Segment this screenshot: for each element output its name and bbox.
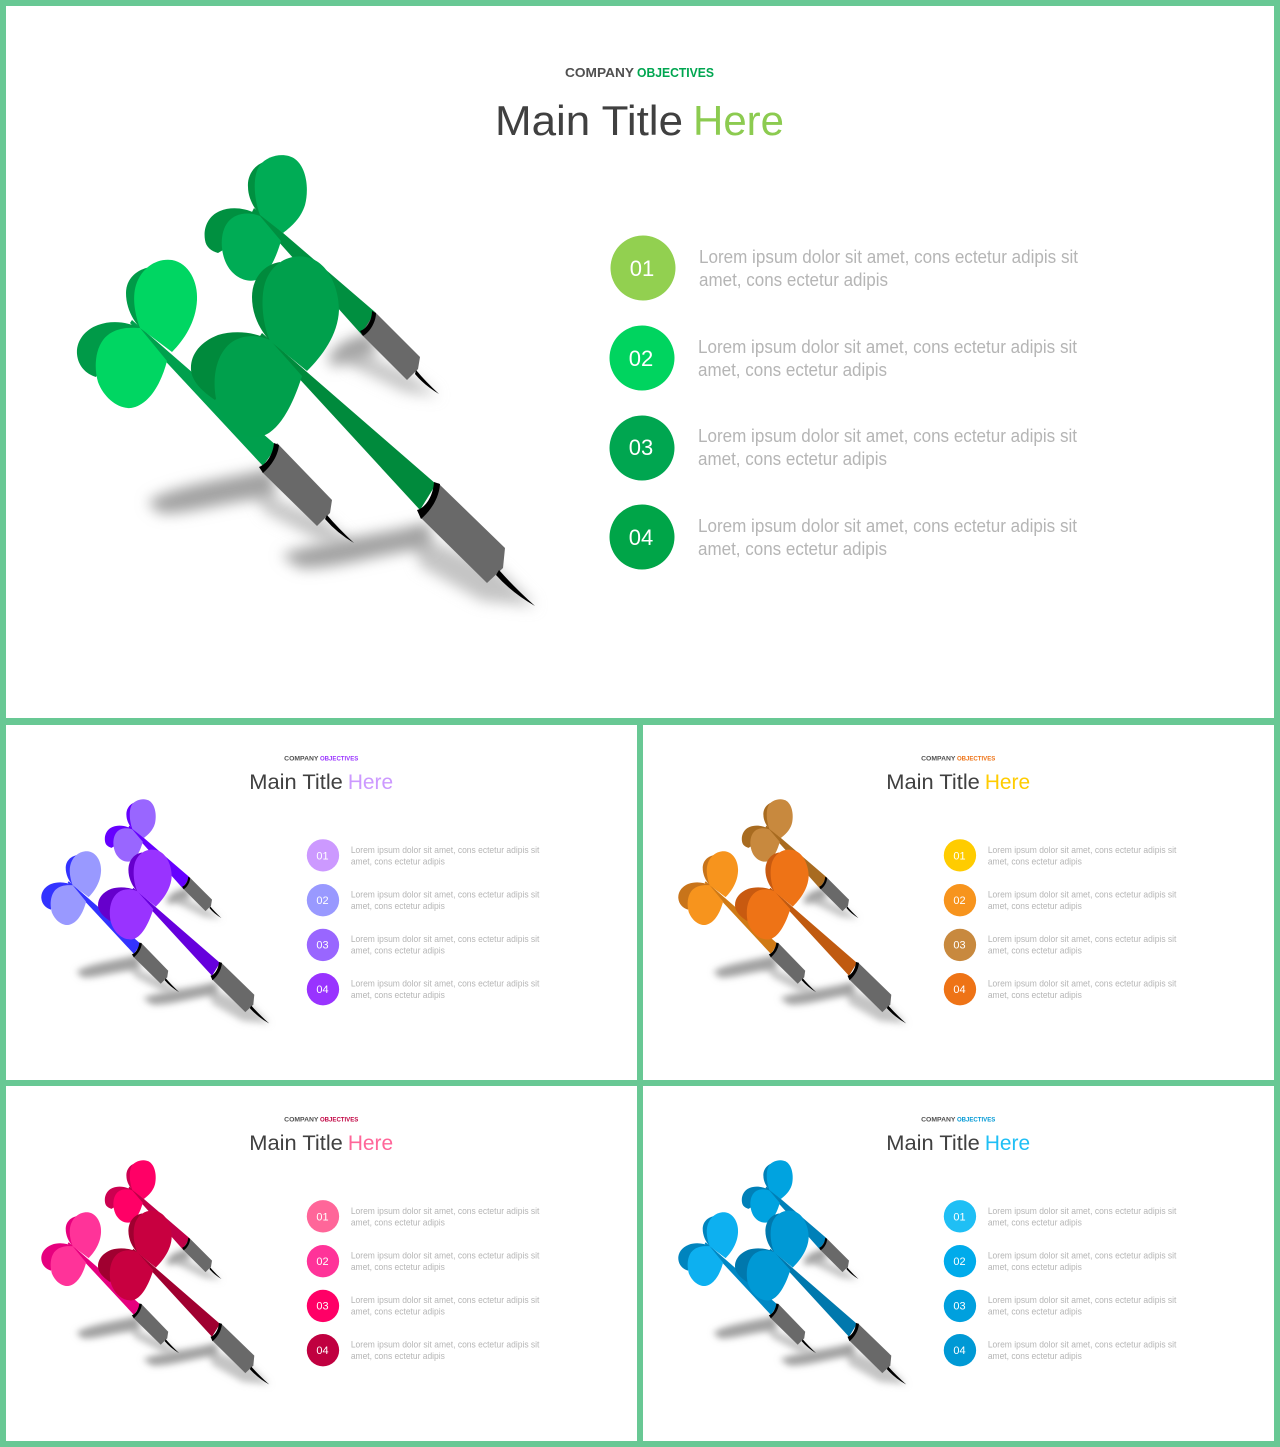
list item 03: Lorem ipsum dolor sit amet, cons ectetur adipis sit <box>351 1295 540 1305</box>
list item 01: 01 <box>953 1211 966 1223</box>
label: company objectives <box>565 65 714 80</box>
label: company objectives: OBJECTIVES <box>320 755 359 762</box>
list item 01 <box>944 1200 1177 1233</box>
list item 02: amet, cons ectetur adipis <box>351 901 445 911</box>
list item 02: 02 <box>316 1256 329 1268</box>
panel: orange slide <box>643 725 1274 1080</box>
list item 02: Lorem ipsum dolor sit amet, cons ectetur adipis sit <box>351 890 540 900</box>
dart shadows <box>714 1248 906 1385</box>
icon: left dart <box>41 1212 179 1353</box>
title: Main Title <box>886 1132 980 1155</box>
list item 03: 03 <box>953 939 966 951</box>
label: company objectives <box>921 755 996 762</box>
list item 01: Lorem ipsum dolor sit amet, cons ectetur adipis sit <box>351 1206 540 1216</box>
list item 02: amet, cons ectetur adipis <box>351 1262 445 1272</box>
list item 02 <box>307 884 540 916</box>
list item 01: amet, cons ectetur adipis <box>988 1217 1082 1227</box>
list item 02: 02 <box>316 895 329 907</box>
list item 01 <box>307 839 540 872</box>
list item 03: 03 <box>316 1300 329 1312</box>
icon: front dart <box>735 1211 906 1385</box>
list item 03: Lorem ipsum dolor sit amet, cons ectetur adipis sit <box>351 934 540 944</box>
list item 04: Lorem ipsum dolor sit amet, cons ectetur adipis sit <box>988 979 1177 989</box>
list item 01: Lorem ipsum dolor sit amet, cons ectetur adipis sit <box>988 1206 1177 1216</box>
label: company objectives <box>921 1116 996 1123</box>
list item 04: 04 <box>629 525 653 550</box>
title <box>886 771 1030 794</box>
list item 01: Lorem ipsum dolor sit amet, cons ectetur adipis sit <box>699 247 1078 267</box>
list item 03: Lorem ipsum dolor sit amet, cons ectetur adipis sit <box>988 934 1177 944</box>
title <box>495 97 784 144</box>
panel: pink slide <box>6 1086 637 1441</box>
list item 02: 02 <box>629 346 653 371</box>
icon: back dart <box>105 1160 221 1279</box>
list item 04: amet, cons ectetur adipis <box>988 1351 1082 1361</box>
icon: front dart <box>191 256 535 606</box>
icon: front dart <box>98 1211 269 1385</box>
title: Here <box>985 771 1030 794</box>
list item 02: 02 <box>953 1256 966 1268</box>
list item 04: 04 <box>953 1345 966 1357</box>
title: Here <box>348 771 393 794</box>
label: company objectives: OBJECTIVES <box>320 1116 359 1123</box>
label: company objectives: OBJECTIVES <box>637 65 714 80</box>
list item 01: amet, cons ectetur adipis <box>988 856 1082 866</box>
list item 04: Lorem ipsum dolor sit amet, cons ectetur adipis sit <box>988 1340 1177 1350</box>
list item 03: 03 <box>953 1300 966 1312</box>
list item 01: amet, cons ectetur adipis <box>351 1217 445 1227</box>
title: Main Title <box>886 771 980 794</box>
icon: front dart <box>98 850 269 1024</box>
list item 03: amet, cons ectetur adipis <box>988 1306 1082 1316</box>
list item 03 <box>944 1290 1177 1322</box>
list item 04: amet, cons ectetur adipis <box>698 539 887 559</box>
list item 04 <box>307 973 540 1005</box>
list item 02: amet, cons ectetur adipis <box>988 1262 1082 1272</box>
list item 02 <box>307 1245 540 1277</box>
icon: back dart <box>205 155 439 394</box>
title <box>886 1132 1030 1155</box>
list item 01: 01 <box>316 850 329 862</box>
list item 01 <box>307 1200 540 1233</box>
dart shadows <box>148 332 535 606</box>
list item 01: 01 <box>953 850 966 862</box>
list item 01: 01 <box>316 1211 329 1223</box>
list item 03: amet, cons ectetur adipis <box>988 945 1082 955</box>
title: Here <box>985 1132 1030 1155</box>
list item 04: amet, cons ectetur adipis <box>988 990 1082 1000</box>
list item 02: amet, cons ectetur adipis <box>698 360 887 380</box>
list item 03: amet, cons ectetur adipis <box>351 1306 445 1316</box>
label: company objectives: COMPANY <box>565 65 634 80</box>
list item 02: Lorem ipsum dolor sit amet, cons ectetur adipis sit <box>698 337 1077 357</box>
panel: main slide (green) <box>6 6 1274 718</box>
list item 02: Lorem ipsum dolor sit amet, cons ectetur adipis sit <box>988 1251 1177 1261</box>
title: Main Title <box>249 771 343 794</box>
list item 04: Lorem ipsum dolor sit amet, cons ectetur adipis sit <box>698 516 1077 536</box>
label: company objectives: OBJECTIVES <box>957 1116 996 1123</box>
label: company objectives: COMPANY <box>284 1116 319 1123</box>
list item 01: Lorem ipsum dolor sit amet, cons ectetur adipis sit <box>351 845 540 855</box>
title <box>249 771 393 794</box>
list item 04 <box>307 1334 540 1366</box>
panel: blue slide <box>643 1086 1274 1441</box>
list item 01: amet, cons ectetur adipis <box>699 270 888 290</box>
list item 01: 01 <box>630 256 654 281</box>
list item 03: 03 <box>316 939 329 951</box>
dart shadows <box>714 887 906 1024</box>
list item 04: 04 <box>316 984 329 996</box>
list item 02 <box>944 1245 1177 1277</box>
list item 04: amet, cons ectetur adipis <box>351 990 445 1000</box>
label: company objectives <box>284 755 359 762</box>
title: Main Title <box>249 1132 343 1155</box>
list item 03 <box>307 1290 540 1322</box>
title <box>249 1132 393 1155</box>
label: company objectives: OBJECTIVES <box>957 755 996 762</box>
dart shadows <box>77 887 269 1024</box>
icon: front dart <box>735 850 906 1024</box>
list item 03 <box>610 416 1077 480</box>
label: company objectives: COMPANY <box>921 1116 956 1123</box>
panel: purple slide <box>6 725 637 1080</box>
list item 01 <box>944 839 1177 872</box>
list item 02 <box>944 884 1177 916</box>
icon: left dart <box>678 851 816 992</box>
icon: left dart <box>41 851 179 992</box>
icon: left dart <box>678 1212 816 1353</box>
list item 04 <box>944 1334 1177 1366</box>
list item 04 <box>944 973 1177 1005</box>
list item 01 <box>610 236 1078 300</box>
icon: back dart <box>742 1160 858 1279</box>
list item 03: 03 <box>629 435 653 460</box>
list item 04: Lorem ipsum dolor sit amet, cons ectetur adipis sit <box>351 979 540 989</box>
title: Here <box>348 1132 393 1155</box>
list item 04 <box>610 504 1077 570</box>
list item 04: Lorem ipsum dolor sit amet, cons ectetur adipis sit <box>351 1340 540 1350</box>
dart shadows <box>77 1248 269 1385</box>
list item 04: 04 <box>316 1345 329 1357</box>
title: Here <box>693 97 784 144</box>
label: company objectives: COMPANY <box>921 755 956 762</box>
list item 01: amet, cons ectetur adipis <box>351 856 445 866</box>
icon: left dart <box>77 260 354 543</box>
icon: back dart <box>742 799 858 918</box>
list item 04: amet, cons ectetur adipis <box>351 1351 445 1361</box>
list item 03: Lorem ipsum dolor sit amet, cons ectetur adipis sit <box>988 1295 1177 1305</box>
list item 02 <box>610 326 1077 390</box>
label: company objectives <box>284 1116 359 1123</box>
list item 03 <box>307 929 540 961</box>
list item 03: amet, cons ectetur adipis <box>698 449 887 469</box>
list item 03 <box>944 929 1177 961</box>
list item 03: amet, cons ectetur adipis <box>351 945 445 955</box>
title: Main Title <box>495 97 683 144</box>
label: company objectives: COMPANY <box>284 755 319 762</box>
icon: back dart <box>105 799 221 918</box>
list item 02: Lorem ipsum dolor sit amet, cons ectetur adipis sit <box>988 890 1177 900</box>
list item 02: Lorem ipsum dolor sit amet, cons ectetur adipis sit <box>351 1251 540 1261</box>
list item 02: 02 <box>953 895 966 907</box>
list item 01: Lorem ipsum dolor sit amet, cons ectetur adipis sit <box>988 845 1177 855</box>
list item 04: 04 <box>953 984 966 996</box>
list item 03: Lorem ipsum dolor sit amet, cons ectetur adipis sit <box>698 426 1077 446</box>
list item 02: amet, cons ectetur adipis <box>988 901 1082 911</box>
